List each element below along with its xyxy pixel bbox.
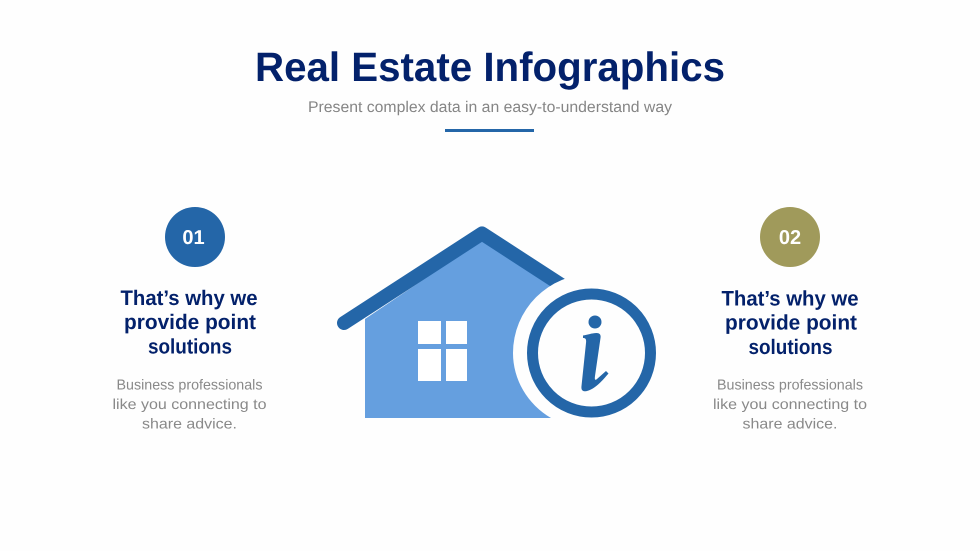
number badge 01 [165,207,225,267]
heading 01: solutions [148,336,232,358]
badge halo [513,274,680,420]
info letter i [581,316,608,391]
body text 02 [713,378,867,432]
heading 02: solutions [748,336,832,359]
heading 02: That’s why we [722,288,858,310]
subtitle: Present complex data in an easy-to-understand way [308,99,672,116]
body text 02: Business professionals [717,378,863,394]
window [418,321,467,381]
title underline [445,129,534,132]
icon: house with info badge [344,234,680,420]
heading 01: provide point [124,311,256,334]
info circle [532,294,650,412]
heading 01 [120,287,258,358]
number badge 01: 01 [182,227,205,249]
body text 02: like you connecting to [713,397,867,413]
house body [365,240,566,418]
number badge 02 [760,207,820,267]
heading 02 [722,288,858,359]
title: Real Estate Infographics [255,44,725,90]
body text 01 [112,378,266,432]
body text 01: share advice. [142,416,237,432]
heading 02: provide point [725,312,857,334]
panel: point 01 [112,207,266,432]
body text 02: share advice. [742,416,838,432]
panel: point 02 [713,207,867,432]
heading 01: That’s why we [120,287,258,310]
house roof [344,234,566,323]
body text 01: Business professionals [116,378,262,394]
number badge 02: 02 [779,227,801,249]
body text 01: like you connecting to [112,397,266,413]
